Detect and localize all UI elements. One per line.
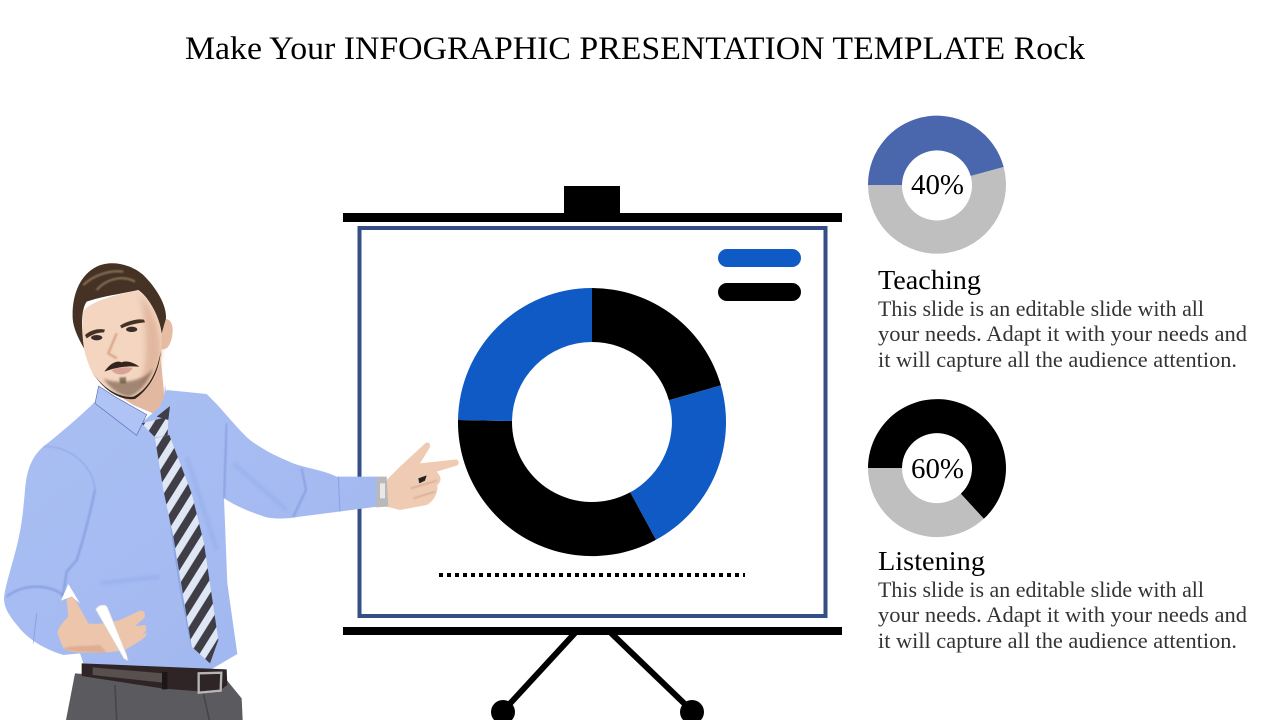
legend pill blue [718,249,801,267]
presenter figure [4,263,459,720]
hair [73,263,166,348]
listening block [868,399,1247,653]
head [73,263,173,399]
dotted line [439,573,745,577]
listening description: your needs. Adapt it with your needs and [878,602,1247,627]
marker [96,605,128,661]
teaching percentage: 40% [911,170,964,201]
title: Make Your INFOGRAPHIC PRESENTATION TEMPLATE Rock [185,31,1086,67]
teaching description [878,296,1247,372]
eyes and brows [85,329,105,338]
collar [95,386,147,435]
face [82,291,162,398]
listening percentage: 60% [911,454,964,485]
ear [161,319,173,349]
teaching donut 40% [868,116,1006,254]
listening description [878,577,1247,653]
teaching heading: Teaching [878,265,981,295]
trousers [66,673,243,720]
screen top rail [343,213,842,222]
projector screen [343,186,842,720]
listening heading: Listening [878,546,985,576]
pointing hand [376,442,459,510]
lower hand with marker [57,597,147,661]
shirt [4,390,379,672]
teaching description: your needs. Adapt it with your needs and [878,321,1247,346]
screen top mount [564,186,620,214]
teaching block [868,116,1247,372]
stand right foot [680,700,704,720]
belt [82,663,227,693]
gap between arm and torso [61,584,80,603]
legend pill black [718,283,801,301]
necktie [142,406,218,663]
screen bottom rail [343,627,842,635]
listening description: it will capture all the audience attention. [878,628,1237,653]
listening description: This slide is an editable slide with all [878,577,1204,602]
beard [93,352,161,399]
neck [102,350,165,415]
wristwatch [376,477,388,507]
listening donut 60% [868,399,1006,537]
main donut chart [458,288,726,556]
teaching description: This slide is an editable slide with all [878,296,1204,321]
teaching description: it will capture all the audience attention. [878,347,1237,372]
stand left foot [491,700,515,720]
stand legs [505,633,690,709]
screen frame [360,228,826,616]
